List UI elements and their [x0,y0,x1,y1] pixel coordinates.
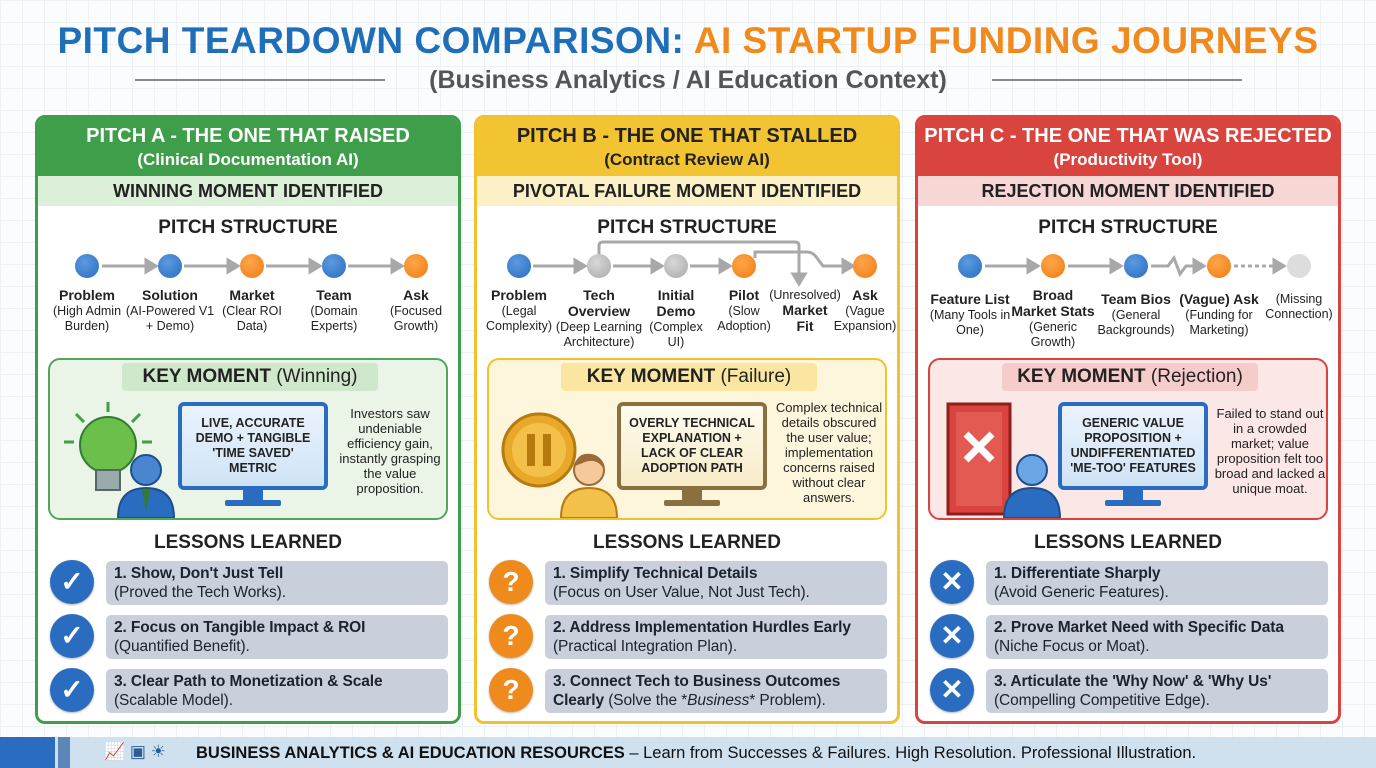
monitor A: 'TIME SAVED' [212,446,294,460]
icon: door and person [946,402,1061,518]
subtitle: (Business Analytics / AI Education Context) [429,66,947,94]
nodes A: Market [229,287,275,303]
title: PITCH TEARDOWN COMPARISON: AI STARTUP FUNDING JOURNEYS [57,20,1319,61]
nodes C: (Funding for Marketing) [1185,308,1253,337]
footer text: BUSINESS ANALYTICS & AI EDUCATION RESOURCES – Learn from Successes & Failures. High Resolution. Professional Illustration. [196,744,1196,762]
heading structure A: PITCH STRUCTURE [158,217,338,238]
lesson C3 [928,668,1328,714]
nodes A: Solution [142,287,198,303]
lesson C2 [928,614,1328,660]
heading lessons A: LESSONS LEARNED [154,532,342,553]
nodes B: (Legal Complexity) [486,304,552,333]
monitor C: GENERIC VALUE [1082,416,1184,430]
lesson B2: ? [502,620,520,651]
heading structure B: PITCH STRUCTURE [597,217,777,238]
lesson A2: ✓ [60,620,84,651]
flow arrows A [102,258,404,274]
lesson C3: 3. Articulate the 'Why Now' & 'Why Us' [994,673,1271,690]
lesson B2: 2. Address Implementation Hurdles Early [553,619,851,636]
lesson B3: 3. Connect Tech to Business Outcomes Clearly (Solve the *Business* Problem). [553,673,840,709]
lesson A3 [48,668,448,714]
lesson C1: (Avoid Generic Features). [994,584,1169,601]
nodes B: Initial [658,287,694,303]
lesson C1: ✕ [940,566,964,597]
nodes A: Ask [403,287,429,303]
lesson B1: (Focus on User Value, Not Just Tech). [553,584,810,601]
panel: pitch C [915,115,1341,724]
nodes B: (Unresolved) [769,288,841,302]
nodes B [486,254,896,349]
monitor B: OVERLY TECHNICAL [629,416,755,430]
lesson C2: ✕ [940,620,964,651]
header C: (Productivity Tool) [1054,150,1202,169]
header C [918,118,1338,176]
nodes C: (General Backgrounds) [1097,308,1175,337]
nodes C: Market Stats [1011,303,1095,319]
lesson B1 [488,560,887,606]
nodes B: Market [782,302,828,318]
nodes B: (Deep Learning Architecture) [556,320,642,349]
heading lessons B: LESSONS LEARNED [593,532,781,553]
nodes A: Problem [59,287,115,303]
lesson A1 [48,560,448,606]
header C: PITCH C - THE ONE THAT WAS REJECTED [924,125,1332,147]
lesson B3: ? [502,674,520,705]
nodes C: (Missing Connection) [1265,292,1333,321]
subband B [477,176,897,206]
nodes A: Team [316,287,352,303]
lesson A1: 1. Show, Don't Just Tell [114,565,283,582]
lesson A3: 3. Clear Path to Monetization & Scale [114,673,382,690]
text B: Complex technical details obscured the user value; implementation concerns raised without clear answers. [776,400,882,505]
monitor B: EXPLANATION + [642,431,742,445]
lesson C1: 1. Differentiate Sharply [994,565,1160,582]
monitor C: UNDIFFERENTIATED [1071,446,1195,460]
header B: PITCH B - THE ONE THAT STALLED [517,125,857,147]
monitor C: 'ME-TOO' FEATURES [1070,461,1196,475]
lesson C3: ✕ [940,674,964,705]
nodes A: (Clear ROI Data) [222,304,282,333]
lesson B3 [488,668,887,714]
nodes B: Fit [796,318,814,334]
subband B: PIVOTAL FAILURE MOMENT IDENTIFIED [513,181,861,201]
monitor A: LIVE, ACCURATE [201,416,305,430]
nodes C: Broad [1033,287,1073,303]
lesson A2: 2. Focus on Tangible Impact & ROI [114,619,365,636]
nodes B: (Slow Adoption) [717,304,771,333]
subband C: REJECTION MOMENT IDENTIFIED [981,181,1274,201]
footer [0,737,1376,768]
panel: pitch A [35,115,461,724]
nodes B: Ask [852,287,878,303]
subband A: WINNING MOMENT IDENTIFIED [113,181,383,201]
lesson A2: (Quantified Benefit). [114,638,250,655]
lesson C3: (Compelling Competitive Edge). [994,692,1210,709]
text C: Failed to stand out in a crowded market; value proposition felt too broad and lacked a unique moat. [1215,406,1325,496]
nodes B: (Vague Expansion) [834,304,896,333]
lesson C2: 2. Prove Market Need with Specific Data [994,619,1284,636]
nodes B: Tech [583,287,615,303]
footer icons: 📈 ▣ ☀ [104,742,166,761]
heading lessons C: LESSONS LEARNED [1034,532,1222,553]
lesson A2 [48,614,448,660]
key moment A [48,358,448,520]
key moment C: KEY MOMENT (Rejection) [1017,366,1243,387]
flow arrows B [533,240,854,287]
subband A [38,176,458,206]
heading structure C: PITCH STRUCTURE [1038,217,1218,238]
nodes B: Problem [491,287,547,303]
header A: PITCH A - THE ONE THAT RAISED [86,125,410,147]
monitor B [617,402,767,490]
monitor B: LACK OF CLEAR [641,446,743,460]
lesson A3: (Scalable Model). [114,692,233,709]
key moment C [928,358,1328,520]
nodes B: Demo [657,303,695,319]
lesson B1: 1. Simplify Technical Details [553,565,757,582]
key moment B: KEY MOMENT (Failure) [587,366,791,387]
nodes C: (Generic Growth) [1029,320,1077,349]
nodes C: Feature List [930,291,1010,307]
icon: lightbulb and person [64,402,175,518]
nodes C: (Many Tools in One) [930,308,1010,337]
nodes B: (Complex UI) [649,320,703,349]
lesson A1: ✓ [60,566,84,597]
subband C [918,176,1338,206]
nodes B: Pilot [729,287,759,303]
header A: (Clinical Documentation AI) [137,150,359,169]
lesson B1: ? [502,566,520,597]
lesson C1 [928,560,1328,606]
monitor C [1058,402,1208,490]
nodes A: (AI-Powered V1 + Demo) [126,304,214,333]
panel: pitch B [474,115,900,724]
monitor B: ADOPTION PATH [641,461,743,475]
monitor A: METRIC [229,461,277,475]
flow arrows C [985,255,1287,277]
nodes C: Team Bios [1101,291,1171,307]
nodes B: Overview [568,303,630,319]
nodes A: (High Admin Burden) [53,304,121,333]
lesson B2 [488,614,887,660]
lesson C2: (Niche Focus or Moat). [994,638,1149,655]
monitor A [178,402,328,490]
nodes A: (Domain Experts) [310,304,358,333]
nodes A [53,254,442,333]
icon: pause and person [502,412,618,518]
text A: Investors saw undeniable efficiency gain, instantly grasping the value proposition. [339,406,441,496]
key moment A: KEY MOMENT (Winning) [142,366,358,387]
monitor C: PROPOSITION + [1084,431,1182,445]
lesson A1: (Proved the Tech Works). [114,584,286,601]
header B [477,118,897,176]
lesson B2: (Practical Integration Plan). [553,638,737,655]
monitor A: DEMO + TANGIBLE [196,431,310,445]
nodes A: (Focused Growth) [390,304,442,333]
header A [38,118,458,176]
nodes C: (Vague) Ask [1179,291,1259,307]
nodes C [930,254,1333,349]
header B: (Contract Review AI) [604,150,770,169]
key moment B [487,358,887,520]
lesson A3: ✓ [60,674,84,705]
